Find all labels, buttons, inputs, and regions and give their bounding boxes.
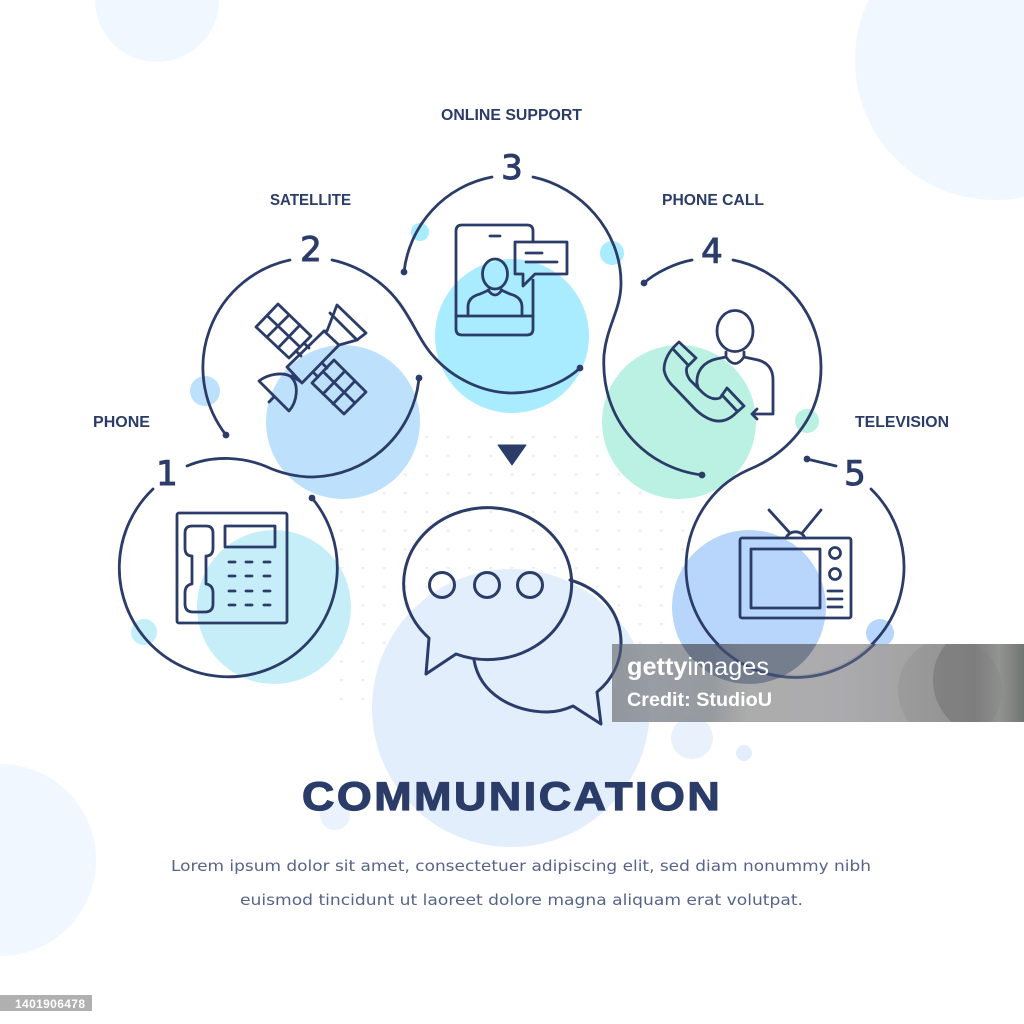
connector curve 1 bbox=[119, 375, 422, 677]
icon: video support phone bbox=[456, 225, 567, 335]
connector curve 2 bbox=[203, 260, 583, 438]
image id badge bbox=[0, 995, 92, 1011]
label: phone: PHONE bbox=[93, 414, 150, 431]
image id badge: 1401906478 bbox=[15, 997, 85, 1011]
watermark: getty images: gettyimages bbox=[627, 653, 769, 681]
label: online support: ONLINE SUPPORT bbox=[441, 107, 582, 124]
label: satellite: SATELLITE bbox=[270, 192, 351, 209]
title: COMMUNICATION bbox=[302, 774, 720, 818]
arrow: down triangle bbox=[498, 445, 526, 465]
panel: television bbox=[740, 414, 949, 618]
label: television: TELEVISION bbox=[855, 414, 949, 431]
icon: television bbox=[740, 510, 851, 618]
connector curve 4 bbox=[641, 260, 904, 676]
icon: satellite bbox=[256, 304, 366, 414]
body text bbox=[171, 857, 871, 909]
watermark: getty images: Credit: StudioU bbox=[627, 690, 772, 711]
panel: phone call bbox=[641, 192, 904, 676]
connector curve 5 bbox=[804, 456, 836, 466]
panel: online support bbox=[401, 107, 705, 478]
panel: satellite bbox=[203, 192, 583, 438]
center speech bubbles bbox=[404, 445, 621, 724]
icon: speech bubbles bbox=[404, 508, 621, 724]
body text: Lorem ipsum dolor sit amet, consectetuer adipiscing elit, sed diam nonummy nibh bbox=[171, 857, 871, 875]
icon: person on call bbox=[664, 310, 773, 421]
panel: phone bbox=[93, 375, 422, 677]
watermark: getty images bbox=[612, 644, 1024, 722]
number 3: 3 bbox=[501, 148, 523, 188]
number 5: 5 bbox=[844, 454, 866, 494]
number 4: 4 bbox=[701, 232, 723, 272]
number 1: 1 bbox=[156, 454, 178, 494]
connector curve 3 bbox=[401, 177, 705, 478]
icon: desk phone bbox=[177, 513, 287, 623]
body text: euismod tincidunt ut laoreet dolore magna aliquam erat volutpat. bbox=[240, 891, 803, 909]
number 2: 2 bbox=[300, 230, 322, 270]
label: phone call: PHONE CALL bbox=[662, 192, 764, 209]
